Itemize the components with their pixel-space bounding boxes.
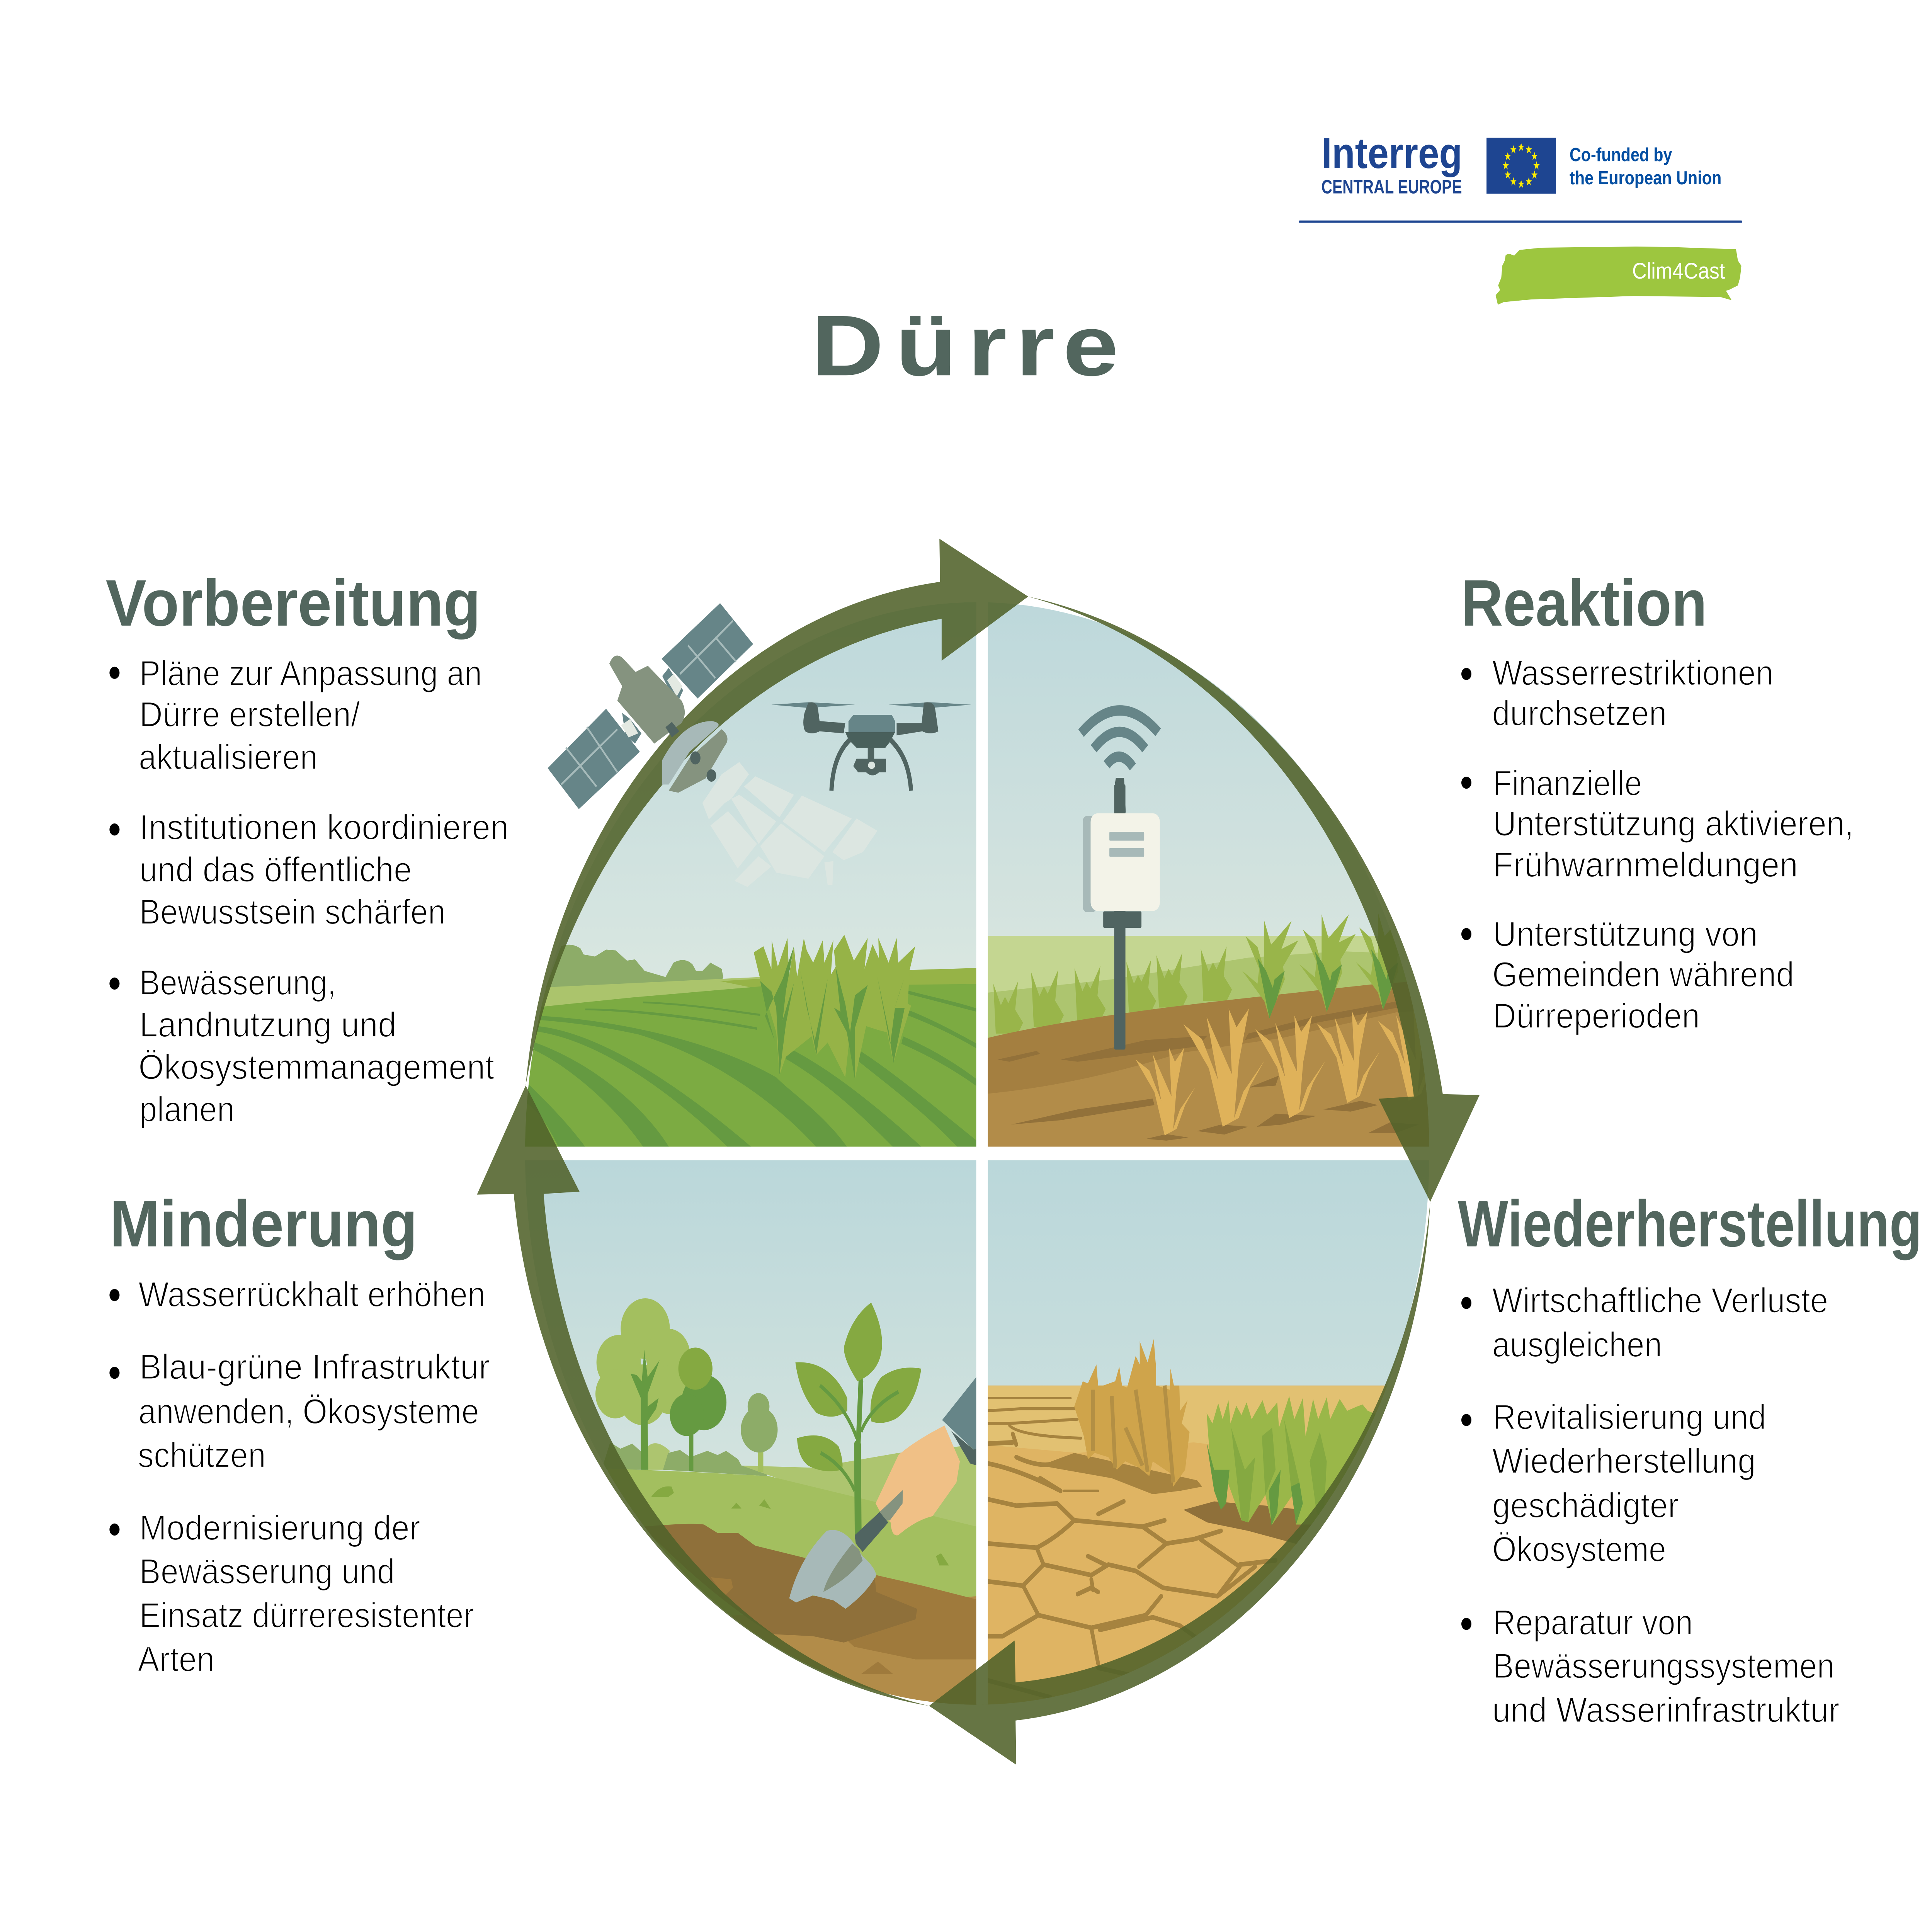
field bands — [982, 936, 1460, 1066]
dry yellow plants — [1136, 1009, 1441, 1135]
list: Vorbereitung actions: Bewässerung, — [139, 963, 336, 1002]
plant shadows — [1040, 1453, 1320, 1546]
logo text: co-funded — [1570, 144, 1721, 189]
logo text: co-funded: the European Union — [1570, 167, 1721, 189]
icon: drone — [771, 702, 971, 791]
list: Minderung actions — [109, 1274, 490, 1679]
seedling — [795, 1303, 921, 1537]
list: Vorbereitung actions: Landnutzung und — [139, 1005, 396, 1044]
list: Vorbereitung actions: planen — [139, 1090, 235, 1129]
list: Reaktion actions: durchsetzen — [1492, 694, 1667, 733]
logo block: Interreg and EU — [1299, 129, 1742, 223]
icon: EU flag — [1486, 138, 1556, 194]
soil — [643, 1524, 977, 1723]
panel: recovery scene (cracked earth) — [981, 1151, 1460, 1723]
large tree — [595, 1298, 690, 1470]
list: Minderung actions: Arten — [138, 1639, 214, 1679]
green field — [523, 984, 977, 1149]
logo text: co-funded: Co-funded by — [1570, 144, 1672, 165]
soil cracks — [988, 1398, 1276, 1697]
heading: Vorbereitung: Vorbereitung — [106, 566, 481, 640]
list: Vorbereitung actions — [109, 653, 509, 1129]
ghost field patches — [702, 762, 878, 887]
list: Wiederherstellung actions: und Wasserinfrastruktur — [1492, 1690, 1840, 1730]
list: Reaktion actions — [1461, 653, 1854, 1035]
panel: Vorbereitung — [106, 566, 509, 1129]
arrow: mitigation to preparation — [477, 1085, 929, 1706]
tree line — [545, 945, 723, 989]
grass tufts — [651, 1486, 949, 1565]
list: Wiederherstellung actions: geschädigter — [1492, 1486, 1679, 1525]
list: Reaktion actions: Unterstützung aktivieren, — [1493, 804, 1854, 843]
list: Wiederherstellung actions: Revitalisierung und — [1493, 1397, 1766, 1437]
list: Wiederherstellung actions — [1461, 1281, 1840, 1730]
icon: soil sensor — [1081, 711, 1160, 1049]
corn plants — [754, 935, 915, 1079]
heading: Wiederherstellung: Wiederherstellung — [1458, 1187, 1922, 1260]
cycle arrows — [477, 539, 1480, 1765]
panel: response scene (sensor, soil) — [981, 566, 1460, 1151]
brown soil — [982, 980, 1453, 1148]
badge: Clim4Cast brush stroke: Clim4Cast — [1632, 259, 1725, 284]
panel: Reaktion — [1461, 566, 1854, 1035]
list: Wiederherstellung actions: Bewässerungssystemen — [1493, 1646, 1835, 1685]
divider: white cross — [503, 566, 1447, 1737]
green plants — [1242, 912, 1412, 1019]
list: Wiederherstellung actions: ausgleichen — [1492, 1325, 1662, 1364]
icon: hand — [876, 1425, 960, 1535]
list: Minderung actions: Blau-grüne Infrastruktur — [139, 1347, 490, 1386]
soil shadows — [997, 1001, 1419, 1141]
back seedlings — [993, 946, 1232, 1034]
list: Vorbereitung actions: Bewusstsein schärfen — [139, 892, 446, 932]
background shrubs — [602, 1442, 767, 1476]
list: Minderung actions: Modernisierung der — [139, 1508, 420, 1547]
list: Minderung actions: Einsatz dürreresistenter — [139, 1595, 474, 1635]
list: Reaktion actions: Finanzielle — [1493, 763, 1642, 803]
list: Reaktion actions: Unterstützung von — [1493, 914, 1758, 954]
satellite dish — [662, 721, 728, 793]
badge: Clim4Cast brush stroke — [1496, 247, 1742, 305]
panel: mitigation scene (trees, planting) — [503, 1151, 981, 1723]
panel: Minderung — [109, 1187, 490, 1679]
list: Reaktion actions: Gemeinden während — [1492, 955, 1794, 994]
panel: preparation scene (field, drone) — [525, 619, 976, 1147]
dry ground — [982, 1386, 1460, 1723]
dry plants — [1074, 1339, 1190, 1486]
list: Vorbereitung actions: Institutionen koordinieren — [139, 808, 509, 847]
icon: wifi signal — [1081, 711, 1158, 767]
list: Wiederherstellung actions: Wiederherstellung — [1492, 1441, 1756, 1480]
list: Reaktion actions: Wasserrestriktionen — [1492, 653, 1774, 692]
medium tree — [670, 1348, 726, 1471]
green regrowth plants — [1207, 1396, 1379, 1526]
list: Vorbereitung actions: und das öffentliche — [139, 850, 412, 889]
list: Wiederherstellung actions: Ökosysteme — [1492, 1529, 1666, 1569]
infographic: Dürre disaster cycle — [106, 138, 1918, 1765]
cycle illustration disc — [503, 566, 1460, 1737]
list: Minderung actions: Bewässerung und — [139, 1552, 395, 1591]
list: Vorbereitung actions: aktualisieren — [139, 737, 318, 777]
panel: Wiederherstellung — [1458, 1187, 1922, 1730]
list: Minderung actions: schützen — [138, 1435, 266, 1475]
icon: trowel — [789, 1490, 903, 1609]
logo text: Interreg: Interreg — [1321, 129, 1462, 177]
field furrows — [524, 990, 977, 1149]
arrow: recovery to mitigation — [929, 1202, 1430, 1765]
list: Wiederherstellung actions: Wirtschaftliche Verluste — [1492, 1281, 1828, 1320]
arrow: preparation to response — [526, 539, 1028, 1085]
list: Vorbereitung actions: Pläne zur Anpassung an — [139, 653, 482, 693]
heading: Minderung: Minderung — [110, 1187, 417, 1260]
title: Dürre — [811, 298, 1119, 394]
list: Reaktion actions: Dürreperioden — [1493, 996, 1700, 1035]
arrow: response to recovery — [1028, 597, 1480, 1202]
sleeve — [942, 1376, 977, 1466]
list: Minderung actions: Wasserrückhalt erhöhen — [138, 1274, 485, 1314]
list: Vorbereitung actions: Ökosystemmanagement — [138, 1047, 494, 1087]
list: Vorbereitung actions: Dürre erstellen/ — [139, 694, 360, 734]
list: Wiederherstellung actions: Reparatur von — [1493, 1602, 1693, 1642]
heading: Reaktion: Reaktion — [1461, 566, 1707, 640]
hills — [742, 1444, 977, 1529]
list: Reaktion actions: Frühwarnmeldungen — [1493, 845, 1798, 884]
logo text: Central Europe: CENTRAL EUROPE — [1321, 176, 1462, 197]
icon: satellite — [548, 603, 753, 809]
list: Minderung actions: anwenden, Ökosysteme — [138, 1391, 479, 1431]
small tree — [741, 1393, 778, 1472]
